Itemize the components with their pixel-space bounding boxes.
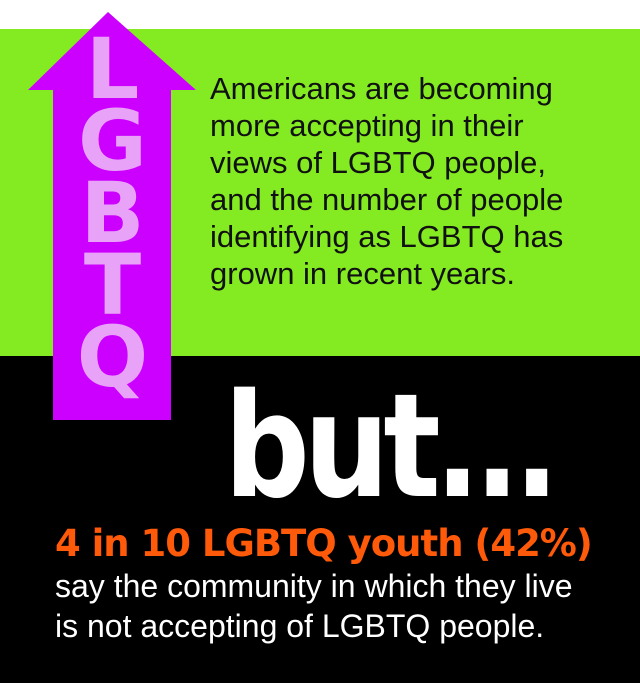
text block: intro: views of LGBTQ people, — [210, 145, 546, 180]
stat description: is not accepting of LGBTQ people. — [55, 608, 544, 644]
text block: intro: identifying as LGBTQ has — [210, 219, 563, 254]
text block: intro: more accepting in their — [210, 108, 524, 143]
icon: magenta up arrow with LGBTQ: L — [86, 20, 139, 118]
panel: green top band — [0, 29, 640, 356]
heading: but...: but... — [224, 364, 553, 531]
text block: intro: grown in recent years. — [210, 256, 515, 291]
stat description: say the community in which they live — [55, 568, 573, 604]
icon: magenta up arrow with LGBTQ: T — [84, 236, 141, 334]
panel: black bottom band — [0, 356, 640, 683]
icon: magenta up arrow with LGBTQ: G — [78, 92, 147, 190]
icon: magenta up arrow with LGBTQ — [28, 12, 196, 420]
text block: intro: Americans are becoming — [210, 71, 553, 106]
stat description — [55, 568, 573, 644]
callout: 42% statistic — [55, 522, 592, 644]
text block: intro: and the number of people — [210, 182, 563, 217]
stat headline: 4 in 10 LGBTQ youth (42%) — [55, 522, 592, 565]
icon: magenta up arrow with LGBTQ: Q — [77, 308, 148, 406]
text block: intro — [210, 71, 563, 291]
icon: magenta up arrow with LGBTQ: B — [80, 164, 145, 262]
